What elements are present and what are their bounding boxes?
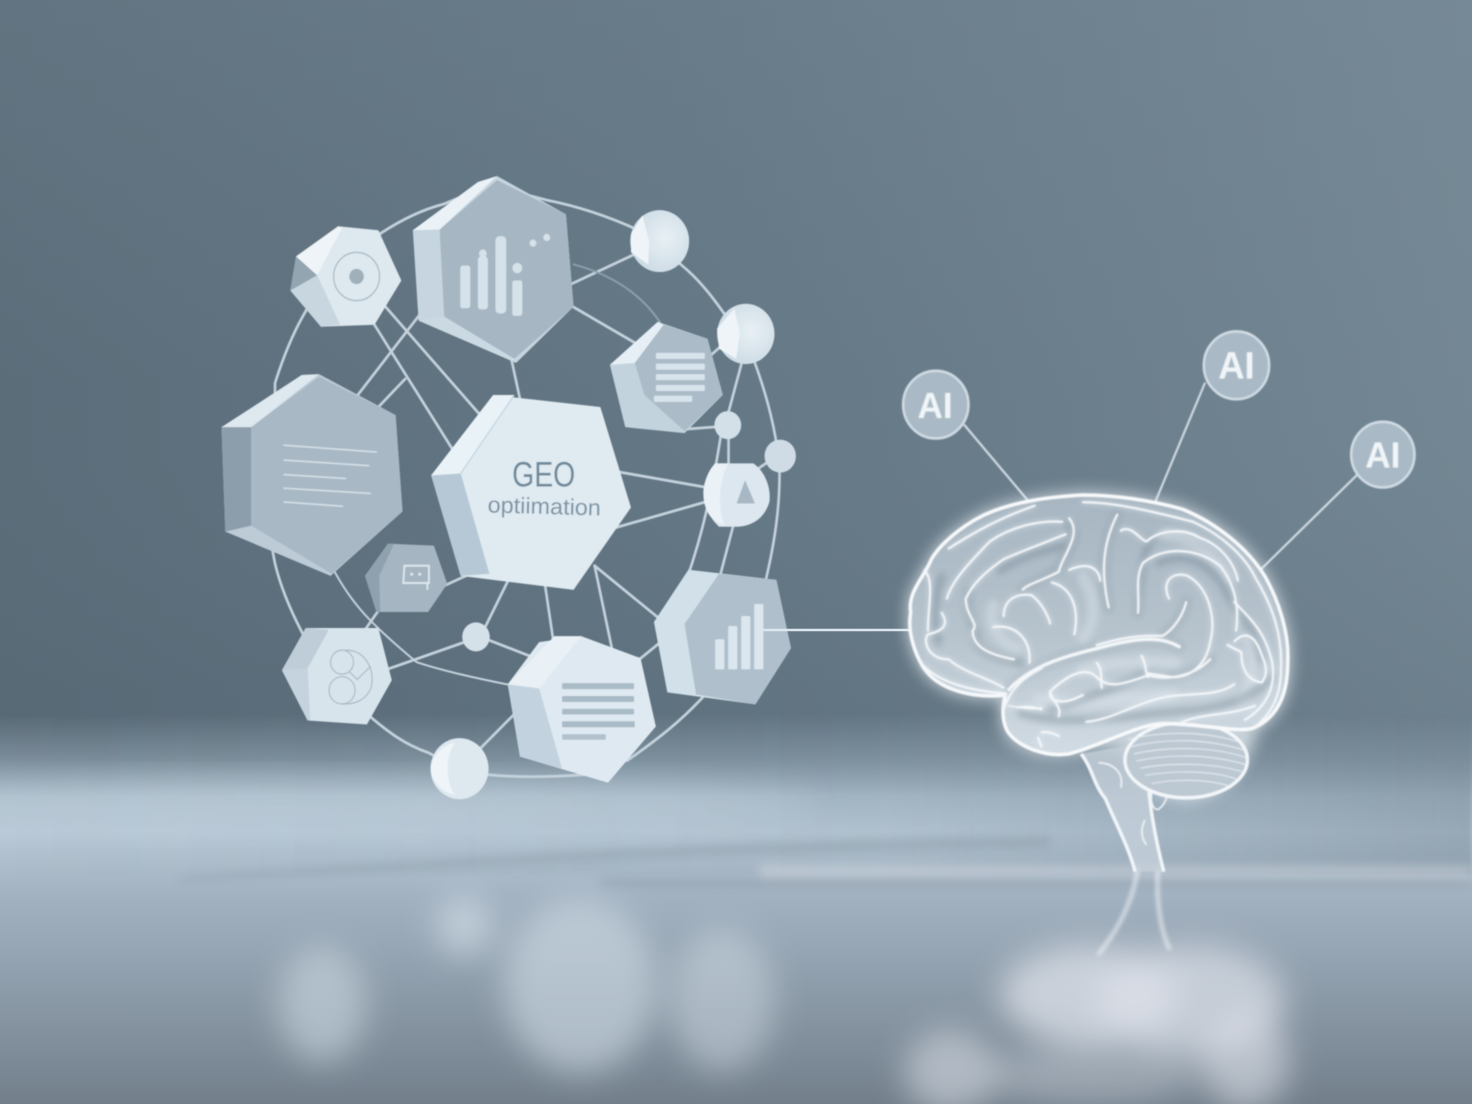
hexagon: text list icon [508, 636, 656, 783]
optimation label: optiimation [487, 492, 601, 521]
cerebellum [1125, 722, 1247, 798]
sphere nodes [430, 210, 796, 799]
AI node right: AI [1365, 435, 1400, 476]
hexagon: triangle sphere node [703, 463, 770, 527]
hexagon: document list icon [610, 322, 723, 433]
connector: network to brain [760, 629, 912, 631]
brain folds highlights [921, 502, 1281, 747]
brain folds shading [935, 515, 1272, 720]
brain with AI nodes [903, 331, 1415, 872]
brain gyri light patches [992, 534, 1253, 702]
AI connector lines [964, 382, 1357, 570]
hexagon: circles icon [282, 628, 392, 724]
brain folds glow [921, 502, 1281, 747]
brain stem [1081, 745, 1167, 872]
hexagon: GEO optimation center [431, 395, 631, 590]
AI node right [1351, 422, 1415, 487]
AI node center [1204, 331, 1269, 399]
reflective floor [0, 715, 1472, 1104]
cerebrum fill and outline [910, 495, 1288, 755]
hexagon: rising bars icon [654, 570, 791, 704]
hexagon: small screen icon [365, 544, 447, 612]
AI node left: AI [918, 385, 953, 426]
outer ring and connector lines [267, 190, 780, 777]
GEO network cluster [221, 176, 796, 799]
AI node left [903, 371, 969, 439]
hexagon: target icon [290, 226, 401, 327]
hexagon: bar chart icon [413, 176, 574, 363]
network reflection in floor [278, 895, 774, 1073]
hexagon: big document [221, 374, 402, 576]
brain glow [910, 495, 1288, 797]
brain reflection in floor [904, 866, 1289, 1104]
AI node center: AI [1218, 344, 1255, 387]
GEO label: GEO [512, 456, 575, 495]
